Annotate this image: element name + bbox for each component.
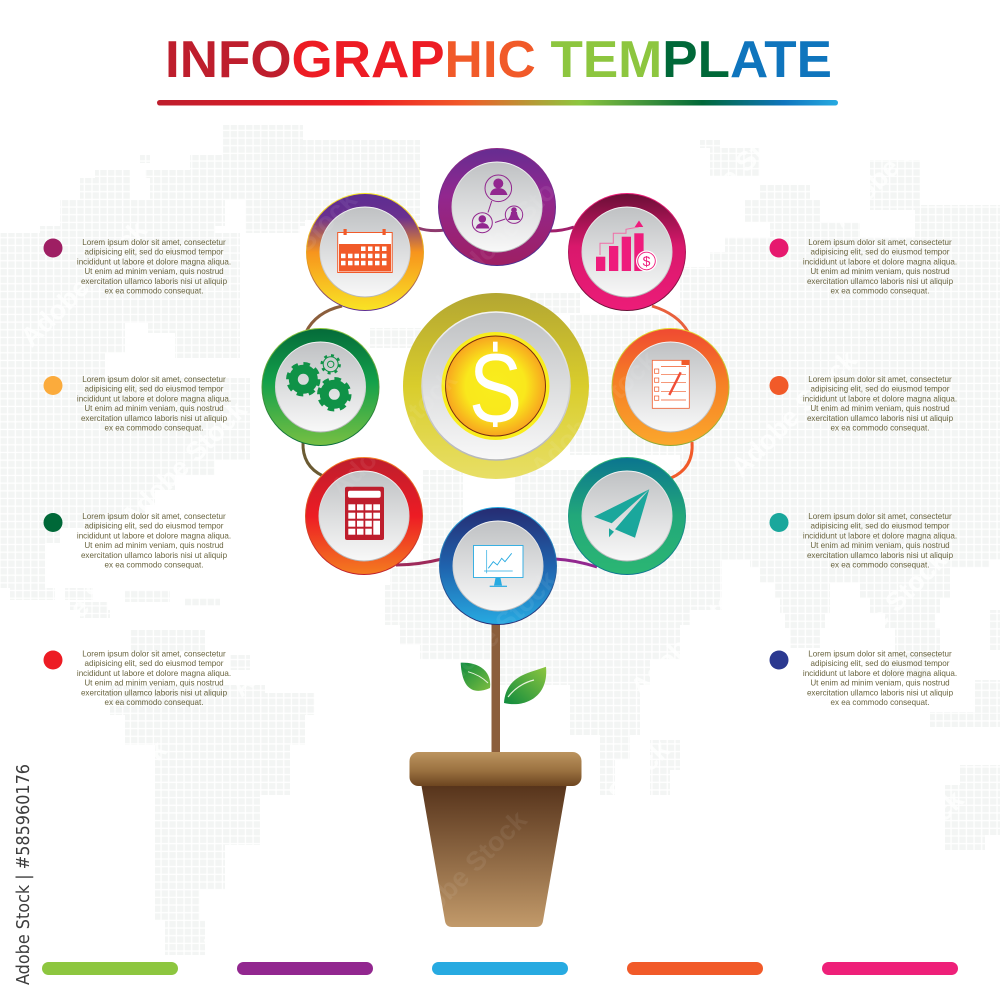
bullet 2 bbox=[44, 376, 62, 395]
left text block 3: Ut enim ad minim veniam, quis nostrud bbox=[84, 541, 224, 550]
circle: calendar bbox=[306, 193, 424, 311]
right text block 1: incididunt ut labore et dolore magna aliqua. bbox=[803, 257, 957, 266]
left text block 1: Lorem ipsum dolor sit amet, consectetur bbox=[82, 238, 226, 247]
watermark pattern over the map: Adobe Stock bbox=[115, 394, 253, 533]
left text block 1: incididunt ut labore et dolore magna aliqua. bbox=[77, 257, 231, 266]
left text block 1 bbox=[44, 238, 231, 296]
circle: calculator bbox=[305, 457, 423, 575]
icon: monitor with line chart bbox=[474, 546, 523, 587]
watermark pattern over the map: Adobe Stock bbox=[815, 544, 953, 683]
right leaf bbox=[504, 667, 546, 704]
watermark pattern over the map: Adobe Stock bbox=[538, 734, 676, 873]
icon: bar chart with arrow: $ bbox=[643, 253, 651, 269]
right text block 4: Lorem ipsum dolor sit amet, consectetur bbox=[808, 650, 952, 658]
watermark pattern over the map: Adobe Stock bbox=[625, 564, 763, 703]
pot rim bbox=[410, 752, 582, 786]
watermark pattern over the map: Adobe Stock bbox=[195, 824, 333, 963]
circle: gears bbox=[262, 328, 380, 446]
left text block 2: ex ea commodo consequat. bbox=[104, 424, 204, 432]
right text block 4: incididunt ut labore et dolore magna aliqua. bbox=[803, 669, 957, 678]
left text block 3: adipisicing elit, sed do eiusmod tempor bbox=[85, 522, 224, 531]
vertical stock label: Adobe Stock | #585960176 bbox=[14, 764, 34, 985]
right text block 4: exercitation ullamco laboris nisi ut aliquip bbox=[807, 688, 954, 697]
bullet 3 bbox=[44, 513, 62, 532]
right text block 3: ex ea commodo consequat. bbox=[830, 560, 930, 570]
pot body bbox=[421, 783, 567, 927]
right text block 3: Lorem ipsum dolor sit amet, consectetur bbox=[808, 512, 952, 521]
left text block 2: Lorem ipsum dolor sit amet, consectetur bbox=[82, 375, 226, 384]
left text block 4: adipisicing elit, sed do eiusmod tempor bbox=[85, 659, 224, 668]
circle: growth chart bbox=[568, 193, 686, 311]
center circle: dollar coin bbox=[403, 293, 589, 479]
watermark pattern over the map: Adobe Stock bbox=[718, 731, 856, 870]
right text block 1: Lorem ipsum dolor sit amet, consectetur bbox=[808, 238, 952, 247]
icon: calculator bbox=[345, 487, 384, 540]
watermark pattern over the map: Adobe Stock bbox=[15, 534, 153, 673]
bullet 8 bbox=[770, 650, 788, 670]
circle: network people bbox=[438, 148, 556, 266]
title underline bbox=[157, 100, 838, 106]
faint watermark over the diagram: Adobe Stock bbox=[395, 804, 533, 943]
faint watermark over the diagram: Adobe Stock bbox=[225, 184, 363, 323]
icon: gears bbox=[288, 355, 349, 409]
left text block 4: incididunt ut labore et dolore magna aliqua. bbox=[77, 669, 231, 678]
right text block 2: Ut enim ad minim veniam, quis nostrud bbox=[810, 404, 950, 413]
plant stem bbox=[492, 622, 500, 754]
left text block 2: incididunt ut labore et dolore magna aliqua. bbox=[77, 394, 231, 403]
icon: paper plane bbox=[594, 489, 649, 538]
left text block 2 bbox=[44, 375, 231, 432]
left text block 4: exercitation ullamco laboris nisi ut aliquip bbox=[81, 688, 228, 697]
bullet 1 bbox=[44, 238, 62, 258]
right text block 3: incididunt ut labore et dolore magna aliqua. bbox=[803, 531, 957, 540]
watermark pattern over the map: Adobe Stock bbox=[825, 94, 963, 233]
left text block 4 bbox=[44, 650, 231, 707]
flower pot bbox=[410, 752, 582, 927]
right text block 1: exercitation ullamco laboris nisi ut aliquip bbox=[807, 277, 954, 286]
left leaf bbox=[461, 663, 490, 691]
left text block 1: Ut enim ad minim veniam, quis nostrud bbox=[84, 267, 224, 276]
watermark pattern over the map: Adobe Stock bbox=[225, 564, 363, 703]
watermark pattern over the map: Adobe Stock bbox=[725, 344, 863, 483]
circle: monitor chart bbox=[439, 507, 557, 625]
right text block 1 bbox=[770, 238, 957, 296]
left text block 3: incididunt ut labore et dolore magna aliqua. bbox=[77, 531, 231, 540]
left text block 2: adipisicing elit, sed do eiusmod tempor bbox=[85, 385, 224, 394]
bullet 4 bbox=[44, 650, 62, 670]
left text block 1: exercitation ullamco laboris nisi ut aliquip bbox=[81, 277, 228, 286]
left text block 4: Lorem ipsum dolor sit amet, consectetur bbox=[82, 650, 226, 658]
bullet 6 bbox=[770, 376, 788, 395]
left text block 3: exercitation ullamco laboris nisi ut aliquip bbox=[81, 551, 228, 560]
left text block 1: adipisicing elit, sed do eiusmod tempor bbox=[85, 248, 224, 257]
watermark pattern over the map: Adobe Stock bbox=[15, 214, 153, 353]
dollar sign: S bbox=[469, 334, 522, 442]
watermark pattern over the map: Adobe Stock bbox=[35, 734, 173, 873]
left text block 4: ex ea commodo consequat. bbox=[104, 698, 204, 707]
left text block 2: Ut enim ad minim veniam, quis nostrud bbox=[84, 404, 224, 413]
right text block 4: adipisicing elit, sed do eiusmod tempor bbox=[811, 659, 950, 668]
title: INFOGRAPHIC TEMPLATE bbox=[165, 31, 832, 89]
bullet 7 bbox=[770, 513, 788, 532]
left text block 4: Ut enim ad minim veniam, quis nostrud bbox=[84, 679, 224, 688]
left text block 2: exercitation ullamco laboris nisi ut aliquip bbox=[81, 414, 228, 423]
bullet 5 bbox=[770, 238, 788, 258]
circle: paper plane bbox=[568, 457, 686, 575]
right text block 3 bbox=[770, 512, 957, 570]
right text block 2: ex ea commodo consequat. bbox=[830, 424, 930, 432]
right text block 4: ex ea commodo consequat. bbox=[830, 698, 930, 707]
left text block 1: ex ea commodo consequat. bbox=[104, 286, 204, 296]
right text block 1: adipisicing elit, sed do eiusmod tempor bbox=[811, 248, 950, 257]
right text block 4 bbox=[770, 650, 957, 707]
right text block 2: incididunt ut labore et dolore magna aliqua. bbox=[803, 394, 957, 403]
faint watermark over the diagram: Adobe Stock bbox=[325, 364, 463, 503]
right text block 3: adipisicing elit, sed do eiusmod tempor bbox=[811, 522, 950, 531]
right text block 3: exercitation ullamco laboris nisi ut aliquip bbox=[807, 551, 954, 560]
faint watermark over the diagram: Adobe Stock bbox=[445, 154, 583, 293]
watermark pattern over the map: Adobe Stock bbox=[25, 24, 163, 163]
right text block 3: Ut enim ad minim veniam, quis nostrud bbox=[810, 541, 950, 550]
right text block 2 bbox=[770, 375, 957, 432]
icon: people network bbox=[472, 175, 523, 233]
bottom colour bars bbox=[42, 962, 958, 975]
circle: checklist document bbox=[612, 328, 730, 446]
icon: checklist document bbox=[652, 360, 690, 408]
connectors between circles bbox=[303, 227, 692, 567]
icon: calendar bbox=[338, 229, 392, 272]
right text block 1: ex ea commodo consequat. bbox=[830, 286, 930, 296]
faint watermark over the diagram bbox=[225, 154, 663, 943]
watermark pattern over the map: Adobe Stock bbox=[665, 104, 803, 243]
faint watermark over the diagram: Adobe Stock bbox=[425, 564, 563, 703]
right text block 2: exercitation ullamco laboris nisi ut aliquip bbox=[807, 414, 954, 423]
left text block 3: ex ea commodo consequat. bbox=[104, 560, 204, 570]
right text block 4: Ut enim ad minim veniam, quis nostrud bbox=[810, 679, 950, 688]
faint watermark over the diagram: Adobe Stock bbox=[525, 344, 663, 483]
right text block 2: Lorem ipsum dolor sit amet, consectetur bbox=[808, 375, 952, 384]
left text block 3: Lorem ipsum dolor sit amet, consectetur bbox=[82, 512, 226, 521]
right text block 1: Ut enim ad minim veniam, quis nostrud bbox=[810, 267, 950, 276]
left text block 3 bbox=[44, 512, 231, 570]
watermark pattern over the map: Adobe Stock bbox=[832, 784, 970, 923]
right text block 2: adipisicing elit, sed do eiusmod tempor bbox=[811, 385, 950, 394]
